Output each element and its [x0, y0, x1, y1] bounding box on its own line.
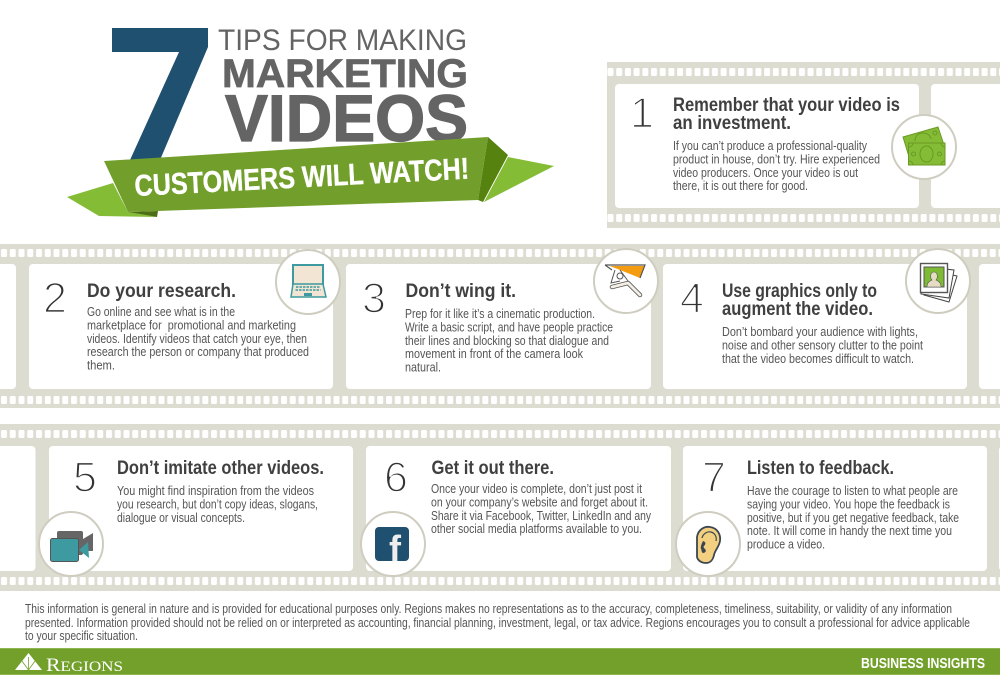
film strip: bottom: [0, 424, 1000, 591]
disclaimer text: to your specific situation.: [25, 629, 138, 643]
heading: tip 4: [722, 280, 877, 320]
body: tip 3: [405, 307, 613, 374]
body: tip 4: that the video becomes difficult to watch.: [722, 352, 914, 366]
heading: tip 4: Use graphics only to: [722, 280, 877, 302]
body: tip 2: [87, 305, 309, 372]
body: tip 2: Go online and see what is in the: [87, 305, 235, 319]
body: tip 2: videos. Identify videos that catch your eye, then: [87, 332, 307, 346]
body: tip 4: Don’t bombard your audience with lights,: [722, 325, 918, 339]
number 3: 3: [362, 274, 386, 322]
body: tip 2: marketplace for promotional and marketing: [87, 318, 296, 332]
body: tip 5: [117, 484, 318, 525]
body: tip 7: Have the courage to listen to what people are: [747, 484, 958, 498]
body: tip 1: video producers. Once your video is out: [673, 166, 858, 180]
heading: tip 7: Listen to feedback.: [747, 457, 894, 479]
body: tip 2: research the person or company that produced: [87, 345, 309, 359]
body: tip 6: [431, 482, 652, 536]
body: tip 3: natural.: [405, 360, 441, 374]
icon: ear: [676, 512, 740, 576]
body: tip 4: [722, 325, 923, 366]
body: tip 7: note. It will come in handy the next time you: [747, 524, 952, 538]
title line: marketing: MARKETING: [222, 52, 468, 96]
body: tip 3: movement in front of the camera look: [405, 347, 584, 361]
panel: tip 3: [346, 249, 658, 389]
number 7: 7: [702, 454, 726, 502]
body: tip 4: noise and other sensory clutter to the point: [722, 338, 923, 352]
ribbon banner: customers will watch: [67, 137, 554, 217]
panel: tip 2: [29, 250, 340, 389]
title line: tips for making: TIPS FOR MAKING: [218, 24, 467, 57]
icon: facebook: f: [389, 528, 402, 569]
panel: tip 4: [663, 249, 970, 389]
body: tip 3: Write a basic script, and have people practice: [405, 320, 613, 334]
body: tip 1: If you can’t produce a professional-quality: [673, 139, 868, 153]
panel: tip 6: [361, 446, 671, 576]
heading: tip 1: an investment.: [673, 112, 791, 134]
panel: tip 5: [39, 446, 353, 576]
body: tip 5: You might find inspiration from the videos: [117, 484, 314, 498]
film strip: top right: [607, 62, 1000, 228]
heading: tip 2: Do your research.: [87, 280, 236, 302]
body: tip 6: Once your video is complete, don’t just post it: [431, 482, 642, 496]
film strip: middle: [0, 244, 1000, 408]
body: tip 6: other social media platforms available to you.: [431, 522, 642, 536]
body: tip 1: [673, 139, 880, 193]
icon: video camera: [39, 512, 103, 576]
heading: tip 1: [673, 94, 900, 134]
title: 7 tips for making marketing videos: [112, 24, 468, 160]
icon: laptop: [276, 250, 340, 314]
number 6: 6: [384, 454, 408, 502]
logo: regions: [15, 653, 123, 676]
icon: money: [892, 115, 956, 179]
panel: tip 7: [676, 446, 987, 576]
panel: tip 1: [615, 84, 956, 208]
heading: tip 5: Don’t imitate other videos.: [117, 457, 324, 479]
body: tip 2: them.: [87, 358, 115, 372]
big numeral 7: [112, 28, 208, 160]
number 5: 5: [73, 454, 97, 502]
title line: videos: VIDEOS: [225, 81, 468, 155]
heading: tip 6: Get it out there.: [432, 457, 554, 479]
body: tip 5: dialogue or visual concepts.: [117, 511, 245, 525]
logo: regions: REGIONS: [46, 655, 123, 676]
number 1: 1: [630, 90, 654, 138]
body: tip 3: Prep for it like it’s a cinematic production.: [405, 307, 595, 321]
footer bar: [0, 648, 1000, 676]
body: tip 7: saying your video. You hope the feedback is: [747, 498, 950, 512]
body: tip 7: produce a video.: [747, 538, 825, 552]
body: tip 5: you research, but don’t copy ideas, slogans,: [117, 498, 318, 512]
body: tip 6: Share it via Facebook, Twitter, LinkedIn and any: [431, 509, 652, 523]
disclaimer text: [25, 602, 970, 643]
number 2: 2: [43, 274, 67, 322]
body: tip 3: their lines and blocking so that dialogue and: [405, 334, 609, 348]
icon: hang glider: [594, 249, 658, 313]
body: tip 7: positive, but if you get negative feedback, take: [747, 511, 959, 525]
body: tip 1: there, it is out there for good.: [673, 179, 808, 193]
number 4: 4: [680, 274, 704, 322]
icon: photos: [906, 249, 970, 313]
heading: tip 3: Don’t wing it.: [406, 280, 516, 302]
body: tip 6: on your company’s website and forget about it.: [431, 496, 648, 510]
ribbon text: CUSTOMERS WILL WATCH!: [134, 153, 470, 203]
body: tip 7: [747, 484, 959, 552]
icon: facebook: [361, 512, 425, 576]
heading: tip 1: Remember that your video is: [673, 94, 900, 116]
body: tip 1: product in house, don’t try. Hire experienced: [673, 152, 880, 166]
heading: tip 4: augment the video.: [722, 298, 873, 320]
